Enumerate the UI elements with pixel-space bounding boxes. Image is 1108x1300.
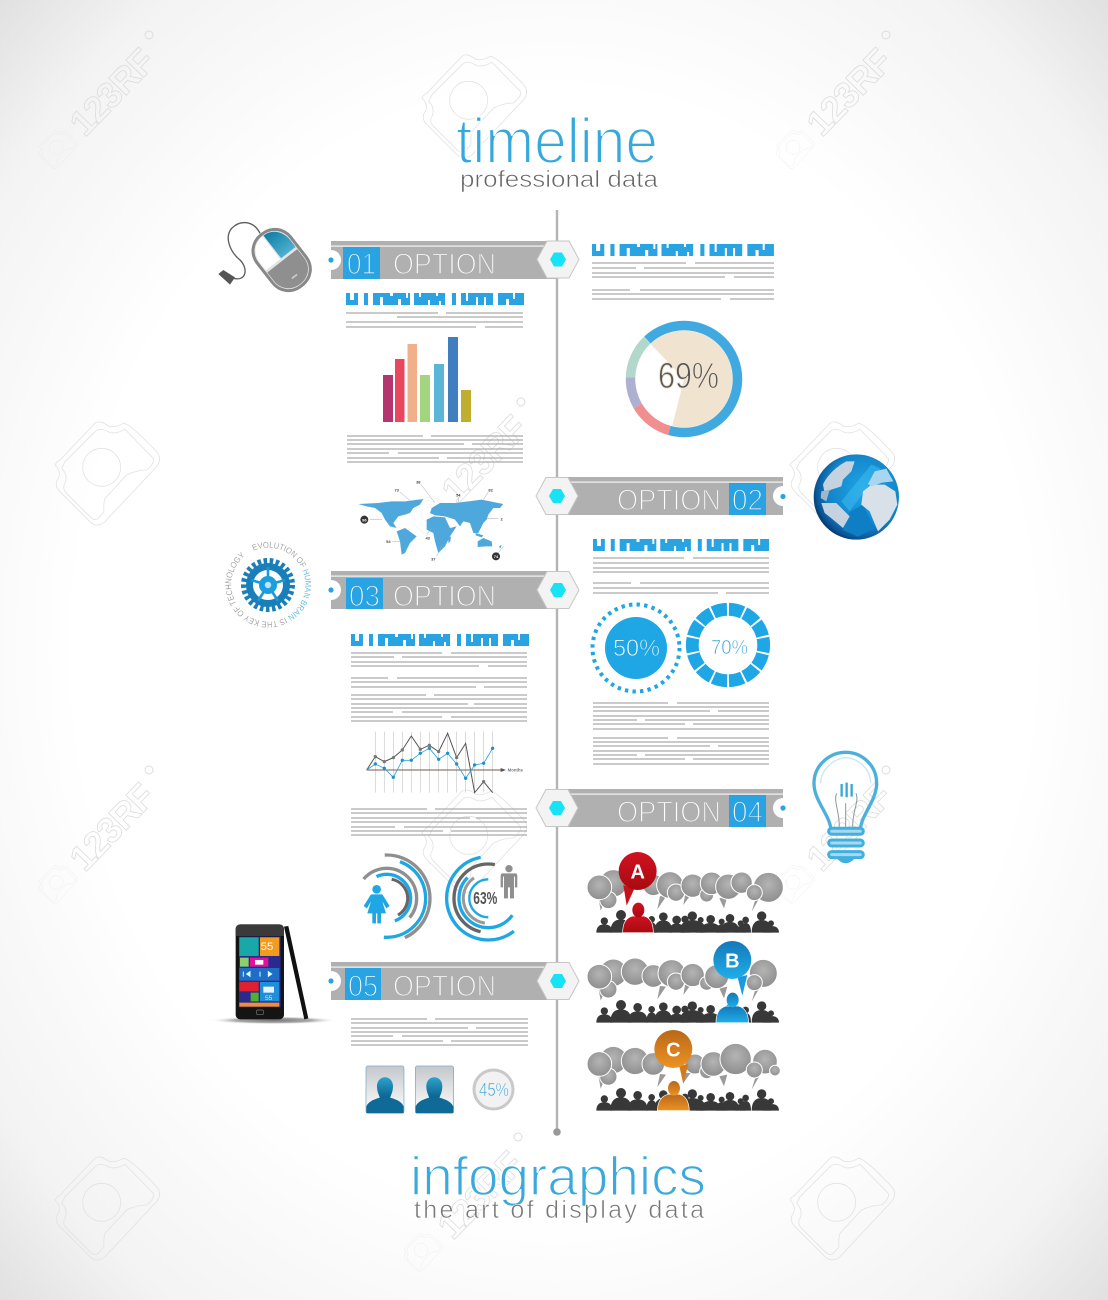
banner: 03 option: 03 xyxy=(349,580,380,613)
icon: smartphone: 55 xyxy=(261,941,273,953)
icon: light bulb xyxy=(814,752,877,863)
world map: 37 xyxy=(431,556,436,561)
world map: 54 xyxy=(456,492,461,497)
title: timeline xyxy=(456,105,658,177)
text block: right section 02 body xyxy=(593,703,769,764)
donut chart: 69%: 69% xyxy=(658,355,719,396)
banner: 03 option: OPTION xyxy=(393,580,496,613)
text block: section 03 footer xyxy=(351,809,527,835)
world map: 82 xyxy=(488,488,494,493)
crowd: speech bubbles option B xyxy=(587,941,779,1023)
radial chart: female xyxy=(343,855,430,942)
world map xyxy=(358,480,504,561)
avatars xyxy=(366,1066,454,1113)
banner: 05 option: 05 xyxy=(348,970,378,1003)
footer heading: the art of display data xyxy=(414,1196,704,1224)
banner: 02 option: OPTION xyxy=(617,484,721,517)
text block: right section 02 intro xyxy=(593,558,769,593)
banner: 04 option: OPTION xyxy=(617,796,721,829)
watermark layer: 123RF xyxy=(61,775,163,879)
footer heading: infographics xyxy=(410,1145,706,1207)
radial chart: male 63% xyxy=(447,857,530,940)
text block: right section 01 heading xyxy=(592,244,774,256)
banner: 05 option: OPTION xyxy=(393,970,496,1003)
text block: section 03 body xyxy=(351,653,527,721)
line chart xyxy=(367,732,524,793)
crowd: speech bubbles option A xyxy=(587,852,783,933)
banner: 04 option: 04 xyxy=(732,796,763,829)
world map: 54 xyxy=(386,539,391,544)
text block: section 01 body xyxy=(347,436,523,462)
icon: computer mouse xyxy=(218,219,320,301)
crowd: speech bubbles option A: A xyxy=(630,861,645,883)
radial chart: male 63%: 63% xyxy=(473,888,497,908)
ring chart: 70%: 70% xyxy=(711,637,748,659)
crowd: speech bubbles option B: B xyxy=(725,950,740,972)
watermark layer: 123RF xyxy=(798,40,900,144)
text block: right section 01 body xyxy=(592,263,774,299)
ring chart: 50%: 50% xyxy=(613,635,660,662)
world map: 96 xyxy=(362,517,367,522)
text block: section 01 heading xyxy=(346,293,524,305)
badge: 45% xyxy=(474,1070,513,1109)
world map: 73 xyxy=(394,488,400,493)
icon: globe xyxy=(814,454,899,540)
ring chart: 50% xyxy=(592,604,680,692)
watermark layer: 123RF xyxy=(433,407,535,511)
watermark layer: 123RF xyxy=(61,40,163,144)
icon: gear with circular text: EVOLUTION OF HUMAN BRAIN IS THE KEY OF TECHNOLOGY xyxy=(225,542,312,628)
banner: 03 option xyxy=(328,571,579,613)
banner: 01 option: 01 xyxy=(347,248,376,281)
banner: 01 option: OPTION xyxy=(393,248,496,281)
timeline axis xyxy=(553,210,561,1136)
line chart: Months xyxy=(508,768,524,773)
crowd: speech bubbles option C: C xyxy=(666,1039,681,1061)
text block: section 03 heading xyxy=(351,634,529,646)
title: professional data xyxy=(460,166,658,192)
banner: 02 option: 02 xyxy=(732,484,763,517)
text block: right section 02 heading xyxy=(593,539,769,551)
world map: 43 xyxy=(425,536,431,541)
icon: smartphone xyxy=(208,924,338,1024)
watermark layer: 123RF xyxy=(798,775,900,879)
watermark layer: 123RF xyxy=(429,1143,531,1247)
ring chart: 70% xyxy=(692,609,764,681)
world map: 38 xyxy=(416,480,421,485)
world map: 2 xyxy=(501,516,504,521)
icon: smartphone: 55 xyxy=(265,995,273,1002)
world map: 74 xyxy=(494,554,499,559)
banner: 01 option xyxy=(328,241,579,281)
banner: 05 option xyxy=(328,962,579,1003)
banner: 02 option xyxy=(536,477,786,517)
text block: section 05 body xyxy=(351,1019,528,1045)
banner: 04 option xyxy=(536,789,786,829)
crowd: speech bubbles option C xyxy=(587,1030,780,1111)
donut chart: 69% xyxy=(630,326,738,432)
watermark layer xyxy=(39,31,900,1272)
bar chart xyxy=(383,337,471,422)
badge: 45%: 45% xyxy=(479,1080,509,1100)
text block: section 01 intro xyxy=(346,313,523,327)
